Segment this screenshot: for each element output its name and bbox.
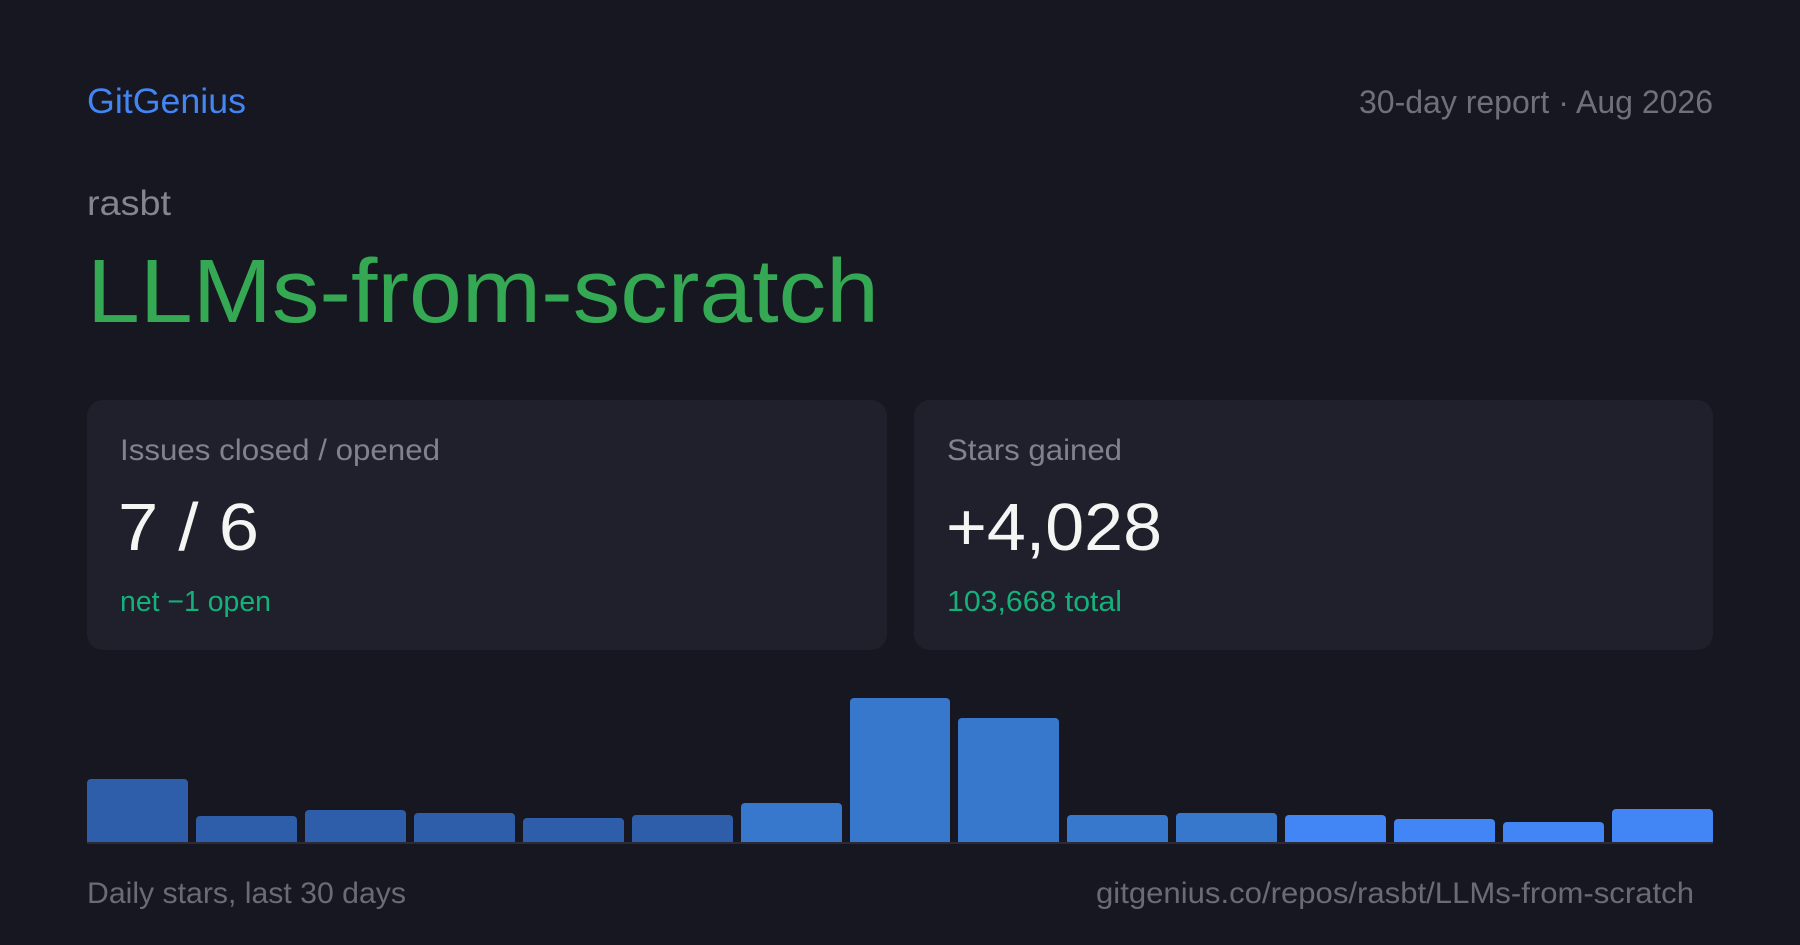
panel: stars gained (914, 400, 1713, 650)
panel: issues closed / opened (87, 400, 887, 650)
stars value: +4,028 (946, 490, 1162, 565)
issues value: 7 / 6 (118, 490, 259, 565)
stars label: Stars gained (947, 434, 1122, 467)
stars total: 103,668 total (947, 586, 1122, 618)
chart caption: Daily stars, last 30 days (87, 877, 406, 910)
title: repository name: LLMs-from-scratch (87, 242, 879, 342)
issues net change: net −1 open (120, 586, 271, 618)
repository owner: rasbt (87, 184, 171, 223)
repository url: gitgenius.co/repos/rasbt/LLMs-from-scratch (1096, 877, 1694, 910)
issues label: Issues closed / opened (120, 434, 440, 467)
report period: 30-day report · Aug 2026 (1359, 84, 1713, 120)
bar chart: daily stars (87, 698, 1713, 844)
brand name: GitGenius (87, 82, 246, 121)
